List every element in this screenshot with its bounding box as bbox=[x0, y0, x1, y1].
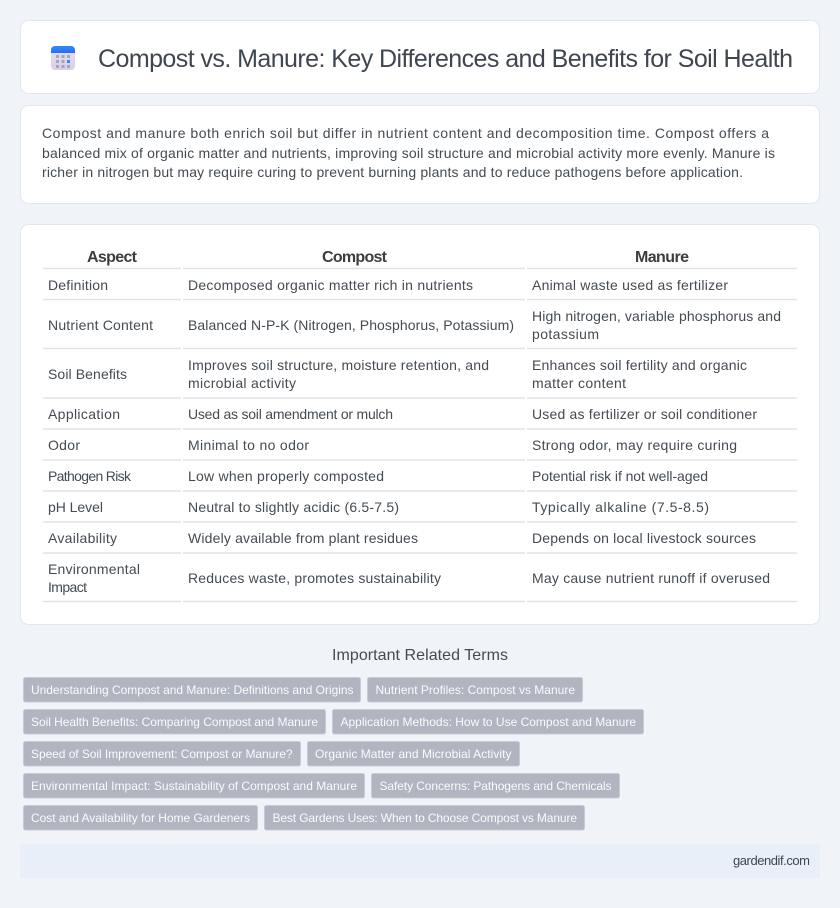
chip: Best Gardens Uses: When to Choose Compost vs Manure bbox=[272, 811, 577, 825]
row: definition bbox=[48, 277, 728, 293]
row: nutrient content: Nutrient Content bbox=[48, 317, 153, 333]
icon: calendar bbox=[51, 46, 75, 70]
chip: Safety Concerns: Pathogens and Chemicals bbox=[380, 779, 612, 793]
related terms chips bbox=[24, 678, 644, 830]
row: application: Used as fertilizer or soil conditioner bbox=[532, 406, 757, 422]
table header bbox=[87, 249, 689, 266]
table header: Manure bbox=[635, 249, 689, 266]
row: definition: Animal waste used as fertilizer bbox=[532, 277, 728, 293]
row: application: Application bbox=[48, 406, 120, 422]
row: soil benefits bbox=[48, 357, 747, 391]
row: definition: Definition bbox=[48, 277, 108, 293]
chip: Soil Health Benefits: Comparing Compost and Manure bbox=[31, 715, 318, 729]
chip: Organic Matter and Microbial Activity bbox=[315, 747, 512, 761]
heading: important related terms: Important Related Terms bbox=[332, 647, 508, 664]
text block: introduction: balanced mix of organic matter and nutrients, improving soil structure and microbial activity more evenly. Manure is bbox=[42, 145, 775, 161]
footer bbox=[20, 844, 820, 878]
row: odor bbox=[48, 437, 737, 453]
chip bbox=[24, 678, 360, 702]
panel: comparison table bbox=[20, 224, 820, 624]
chip bbox=[264, 806, 584, 830]
row: soil benefits: Improves soil structure, moisture retention, and bbox=[188, 357, 489, 373]
row: availability: Availability bbox=[48, 530, 117, 546]
row: nutrient content: High nitrogen, variable phosphorus and bbox=[532, 308, 781, 324]
row: environmental impact: Impact bbox=[48, 579, 87, 595]
row: pH level: pH Level bbox=[48, 499, 103, 515]
footer credit: gardendif.com bbox=[733, 853, 810, 868]
chip bbox=[24, 774, 364, 798]
row: soil benefits: microbial activity bbox=[188, 375, 296, 391]
chip bbox=[308, 742, 520, 766]
chip bbox=[24, 806, 258, 830]
table header: Aspect bbox=[87, 249, 138, 266]
text block: introduction: richer in nitrogen but may require curing to prevent burning plants and to reduce pathogens before application. bbox=[42, 164, 743, 180]
row: pathogen risk: Pathogen Risk bbox=[48, 468, 132, 484]
row: soil benefits: Enhances soil fertility and organic bbox=[532, 357, 747, 373]
row: pH level bbox=[48, 499, 709, 515]
chip: Understanding Compost and Manure: Definitions and Origins bbox=[31, 683, 354, 697]
row: application bbox=[48, 406, 757, 422]
title: Compost vs. Manure: Key Differences and Benefits for Soil Health bbox=[98, 45, 793, 73]
chip bbox=[368, 678, 582, 702]
chip: Speed of Soil Improvement: Compost or Manure? bbox=[31, 747, 293, 761]
chip: Cost and Availability for Home Gardeners bbox=[31, 811, 250, 825]
row: nutrient content: potassium bbox=[532, 326, 599, 342]
row: pH level: Neutral to slightly acidic (6.5-7.5) bbox=[188, 499, 399, 515]
row: environmental impact: Reduces waste, promotes sustainability bbox=[188, 570, 441, 586]
panel: introduction bbox=[20, 106, 820, 204]
row: soil benefits: matter content bbox=[532, 375, 626, 391]
chip bbox=[24, 742, 300, 766]
row: application: Used as soil amendment or mulch bbox=[188, 406, 393, 422]
chip bbox=[372, 774, 620, 798]
table header: Compost bbox=[322, 249, 388, 266]
row: availability bbox=[48, 530, 756, 546]
row: pathogen risk bbox=[48, 468, 708, 484]
row: pathogen risk: Potential risk if not well-aged bbox=[532, 468, 708, 484]
text block: introduction bbox=[42, 125, 775, 180]
chip: Environmental Impact: Sustainability of Compost and Manure bbox=[31, 779, 357, 793]
row: odor: Minimal to no odor bbox=[188, 437, 309, 453]
row: availability: Widely available from plant residues bbox=[188, 530, 418, 546]
row: soil benefits: Soil Benefits bbox=[48, 366, 127, 382]
chip bbox=[332, 710, 644, 734]
row: nutrient content: Balanced N-P-K (Nitrogen, Phosphorus, Potassium) bbox=[188, 317, 514, 333]
row: environmental impact: May cause nutrient runoff if overused bbox=[532, 570, 770, 586]
chip bbox=[24, 710, 326, 734]
row: environmental impact bbox=[48, 561, 770, 595]
panel: header bbox=[20, 20, 820, 94]
row: definition: Decomposed organic matter rich in nutrients bbox=[188, 277, 473, 293]
row: pH level: Typically alkaline (7.5-8.5) bbox=[532, 499, 709, 515]
row: odor: Strong odor, may require curing bbox=[532, 437, 737, 453]
text block: introduction: Compost and manure both enrich soil but differ in nutrient content and decomposition time. Compost offers a bbox=[42, 125, 769, 141]
chip: Application Methods: How to Use Compost and Manure bbox=[340, 715, 636, 729]
row: environmental impact: Environmental bbox=[48, 561, 140, 577]
chip: Nutrient Profiles: Compost vs Manure bbox=[376, 683, 575, 697]
row: odor: Odor bbox=[48, 437, 80, 453]
row: pathogen risk: Low when properly composted bbox=[188, 468, 384, 484]
row: availability: Depends on local livestock sources bbox=[532, 530, 756, 546]
row: nutrient content bbox=[48, 308, 781, 342]
